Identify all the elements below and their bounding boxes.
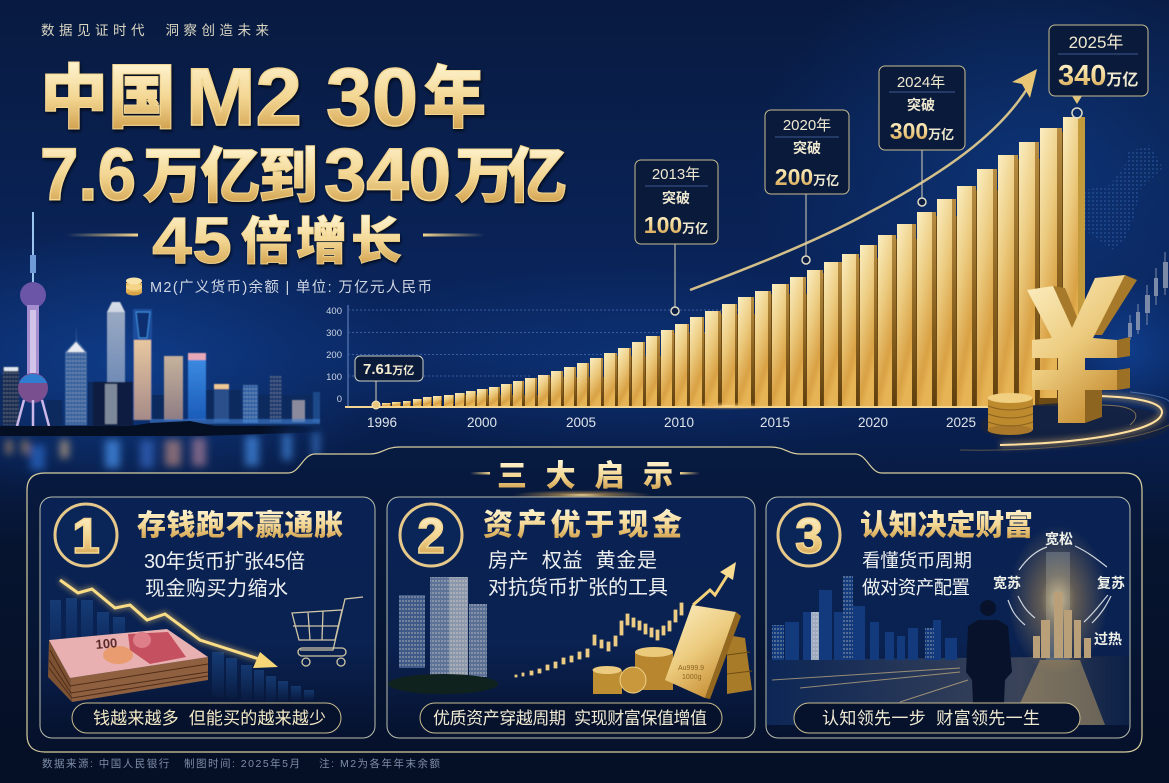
monetary cycle diagram: 复苏 — [1097, 575, 1125, 591]
subtitle: 45x growth: 倍增长 — [241, 213, 402, 270]
distant buildings — [0, 375, 320, 428]
monetary cycle diagram: 过热 — [1094, 631, 1122, 647]
callout: 2013: 突破 — [662, 190, 690, 206]
title: 年 — [423, 61, 486, 137]
card 1: 现金购买力缩水 — [145, 577, 288, 600]
icon: coin stack — [126, 278, 142, 296]
chart: M2 bars — [326, 117, 1085, 430]
callout: 2013: 100万亿 — [644, 212, 708, 238]
gold bars — [665, 605, 752, 699]
number badge — [400, 504, 462, 566]
number badge: 3 — [795, 508, 823, 564]
card 1: 30年货币扩张45倍 — [144, 550, 305, 573]
card 2 — [387, 497, 755, 738]
lit towers — [3, 302, 320, 426]
monetary cycle diagram: 宽苏 — [993, 575, 1021, 591]
caption pill: 优质资产穿越周期 实现财富保值增值 — [433, 709, 707, 728]
title — [40, 52, 567, 216]
gold bars: Au999.9 — [678, 665, 704, 672]
tagline: 数据见证时代 洞察创造未来 — [41, 22, 270, 38]
x axis labels: 2020 — [858, 415, 888, 430]
card 3 — [766, 497, 1130, 738]
night city and road — [767, 576, 1129, 725]
icon: shopping cart — [292, 597, 363, 666]
bars side faces — [390, 117, 1085, 406]
subtitle: 45x growth: 45 — [152, 203, 232, 277]
y axis — [326, 305, 900, 406]
number badge — [55, 504, 117, 566]
callout: 1996: 7.61万亿 — [363, 361, 414, 378]
baseline — [345, 402, 995, 410]
shoreline — [0, 421, 325, 436]
callout: 2020: 2020年 — [783, 117, 831, 134]
card 1: 存钱跑不赢通胀 — [137, 509, 343, 542]
callout: 2024: 突破 — [907, 97, 935, 113]
caption pill — [794, 703, 1080, 733]
icon: banknote stack: 100 — [95, 635, 118, 652]
footer source: 数据来源: 中国人民银行 制图时间: 2025年5月 注: M2为各年年末余额 — [42, 757, 440, 770]
swoosh light trails — [960, 392, 1169, 450]
apartment buildings — [388, 577, 498, 694]
heading: 三大启示 — [497, 460, 673, 493]
icon: declining arrow — [60, 580, 278, 668]
card 2: 资产优于现金 — [483, 508, 682, 542]
x axis labels: 1996 — [367, 415, 397, 430]
card 3: 看懂货币周期 — [862, 550, 972, 571]
subtitle: 45x growth — [66, 203, 485, 277]
growth arrow — [690, 69, 1037, 290]
card 3: 认知决定财富 — [860, 508, 1033, 542]
water reflection — [6, 432, 320, 470]
candlestick trend — [515, 603, 683, 677]
callout: 2024 — [879, 66, 965, 206]
unit label: M2(广义货币)余额 | 单位: 万亿元人民币 — [150, 278, 432, 296]
callout: 2020: 突破 — [793, 140, 821, 156]
callout: 2020: 200万亿 — [775, 164, 839, 190]
icon: banknote stack — [48, 629, 208, 702]
trend arrow — [693, 562, 736, 605]
y axis: 300 — [326, 328, 342, 339]
x axis labels: 2025 — [946, 415, 976, 430]
golden city glow — [1008, 525, 1108, 725]
title: 万亿 — [455, 143, 567, 210]
number badge: 2 — [417, 508, 445, 564]
card 2: 房产 权益 黄金是 — [488, 549, 657, 572]
y axis: 0 — [337, 394, 342, 405]
callout: 2024: 300万亿 — [890, 118, 954, 144]
title: 30 — [326, 52, 418, 143]
number badge — [778, 504, 840, 566]
bars front faces — [382, 117, 1078, 406]
faint China dot map — [1085, 145, 1163, 250]
man silhouette — [966, 600, 1012, 703]
callout: 2025: 340万亿 — [1058, 60, 1138, 92]
caption pill: 认知领先一步 财富领先一生 — [822, 709, 1040, 728]
number badge: 1 — [72, 508, 100, 564]
title: 7.6 — [40, 133, 136, 216]
caption pill — [72, 703, 341, 733]
candlesticks right — [1128, 252, 1168, 340]
title: 340 — [324, 133, 451, 216]
title: 万亿到 — [143, 143, 318, 210]
y axis: 200 — [326, 350, 342, 361]
y axis: 100 — [326, 372, 342, 383]
caption pill: 钱越来越多 但能买的越来越少 — [93, 709, 326, 728]
card 3: 做对资产配置 — [862, 577, 970, 598]
faded bars — [50, 598, 314, 702]
x axis labels: 2000 — [467, 415, 497, 430]
bars dark backing — [463, 132, 1085, 406]
panel: three insights — [27, 447, 1142, 752]
callout: 2024: 2024年 — [897, 74, 945, 91]
icon: golden yen symbol — [1027, 275, 1137, 423]
x axis labels — [367, 415, 976, 430]
callout: 2025 — [1049, 25, 1148, 118]
gold coins — [592, 647, 673, 694]
icon: coin stack — [988, 393, 1033, 435]
callout: 2013: 2013年 — [652, 166, 700, 183]
skyline: Shanghai Lujiazui — [0, 212, 325, 470]
callout: 2025: 2025年 — [1069, 33, 1123, 52]
x axis labels: 2010 — [664, 415, 694, 430]
y axis: 400 — [326, 306, 342, 317]
title: 中国 — [40, 59, 176, 137]
title: M2 — [186, 52, 302, 143]
callout: 1996 — [355, 356, 423, 409]
caption pill — [420, 703, 722, 733]
oriental pearl tower — [17, 212, 49, 426]
gold bars: 1000g — [682, 674, 702, 681]
monetary cycle diagram: 宽松 — [1045, 531, 1073, 547]
card 1 — [40, 497, 375, 738]
card 2: 对抗货币扩张的工具 — [488, 576, 668, 599]
x axis labels: 2015 — [760, 415, 790, 430]
callout: 2020 — [765, 110, 849, 264]
callout: 2013 — [635, 160, 718, 315]
x axis labels: 2005 — [566, 415, 596, 430]
monetary cycle diagram — [993, 531, 1125, 647]
